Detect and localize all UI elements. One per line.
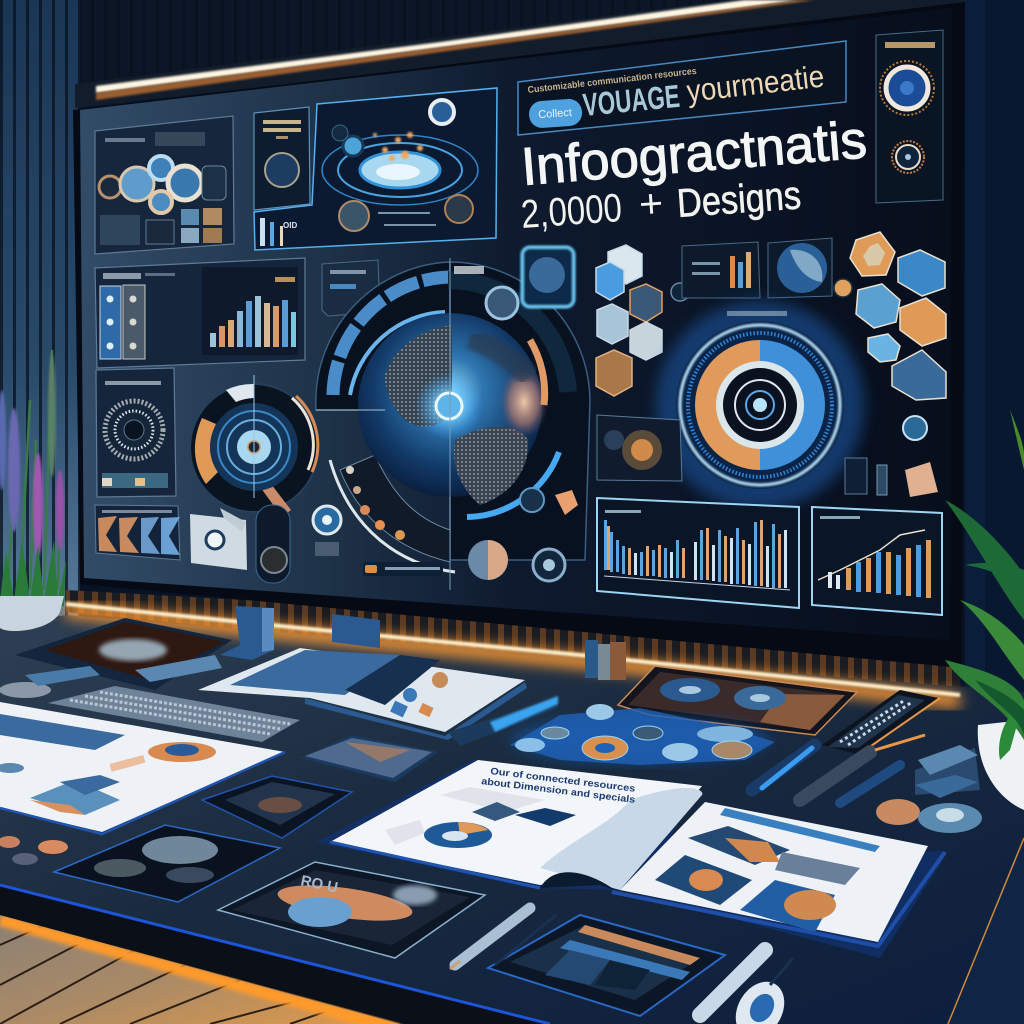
- book heading text line two: about Dimension and specials: [481, 776, 636, 806]
- open magazine top: [198, 648, 527, 740]
- banner heading: VOUAGE: [581, 78, 681, 123]
- panel beside dial: [322, 260, 380, 316]
- desk surface: [0, 615, 1024, 1024]
- top LED strip: [75, 0, 965, 108]
- left plant with purple flowers: [0, 350, 66, 631]
- small tiles bottom right: [845, 416, 938, 497]
- panel: mini globe: [768, 238, 832, 298]
- title: Infoogractnatis: [519, 110, 869, 197]
- header banner: [518, 41, 846, 135]
- floor: wooden boards: [0, 915, 400, 1024]
- lower tablet with galaxy: RO U: [299, 872, 339, 897]
- subtitle: Designs: [676, 173, 802, 226]
- panel: right rings: [876, 30, 943, 203]
- eye art panel: [618, 666, 857, 735]
- gauge dial: [190, 375, 318, 517]
- orange tokens: [0, 836, 68, 865]
- small dock: [135, 655, 222, 682]
- blue pill: [528, 98, 583, 129]
- monitor stand: [220, 606, 380, 660]
- panel: tall card with ring: [254, 107, 310, 210]
- bar chart panel: [597, 498, 799, 608]
- remote with keys: [822, 690, 940, 755]
- wood slats under the screen: [66, 590, 960, 700]
- stack of devices right: [915, 745, 980, 798]
- right plant: [945, 410, 1024, 810]
- book pie chart: [424, 822, 492, 848]
- stylus and dial bottom: [700, 950, 794, 1024]
- subtitle: [520, 173, 802, 237]
- mouse and slim device: [0, 666, 100, 698]
- large open book: [316, 760, 946, 958]
- panel: bar chart and tiles: [95, 258, 305, 368]
- glowing hex tile: [522, 247, 574, 307]
- tray with devices: [488, 915, 725, 1016]
- keyboard: [48, 686, 300, 742]
- subtitle: 2,0000: [520, 186, 623, 237]
- book heading text: Our of connected resources: [490, 766, 636, 795]
- left poster: [0, 702, 285, 834]
- under-screen LED strip: [66, 604, 960, 701]
- holographic hex cluster: [510, 704, 775, 765]
- blue marker: [448, 696, 558, 746]
- panel: swirl hero: [254, 88, 497, 250]
- small art card: [300, 735, 438, 782]
- panel: particle ring: [96, 368, 176, 497]
- panel: small map tile: [597, 415, 682, 481]
- line and bar chart panel: [812, 507, 942, 615]
- big ring chart: [656, 301, 864, 509]
- capsule with rings: [256, 505, 341, 583]
- pen bottom: [450, 908, 556, 969]
- panel: mini bars: [682, 242, 760, 298]
- round tokens pair: [876, 799, 982, 833]
- hexagon cluster right: [834, 232, 946, 400]
- hexagon cluster left: [596, 245, 689, 396]
- big globe dial: [316, 258, 590, 590]
- banner subheading: yourmeatie: [685, 59, 826, 109]
- small dark tablet: [202, 776, 352, 838]
- white card with ring: [190, 508, 247, 570]
- banner small line: Customizable communication resources: [527, 66, 697, 96]
- book stack upright: [585, 640, 626, 680]
- blue pill: Collect: [538, 107, 572, 121]
- subtitle: +: [638, 181, 665, 227]
- right page heading band: [720, 808, 880, 852]
- pens and styluses: [752, 735, 925, 803]
- panel: top-left circles: [95, 116, 234, 254]
- main wall screen: [73, 2, 965, 668]
- tablet top-left: [15, 618, 232, 690]
- lower tablet with galaxy: [218, 862, 485, 958]
- chevron arrows: [95, 505, 180, 560]
- small label strip: [363, 562, 443, 576]
- mid-left dark tablet: [54, 825, 280, 902]
- panel: swirl hero: OID: [283, 221, 297, 230]
